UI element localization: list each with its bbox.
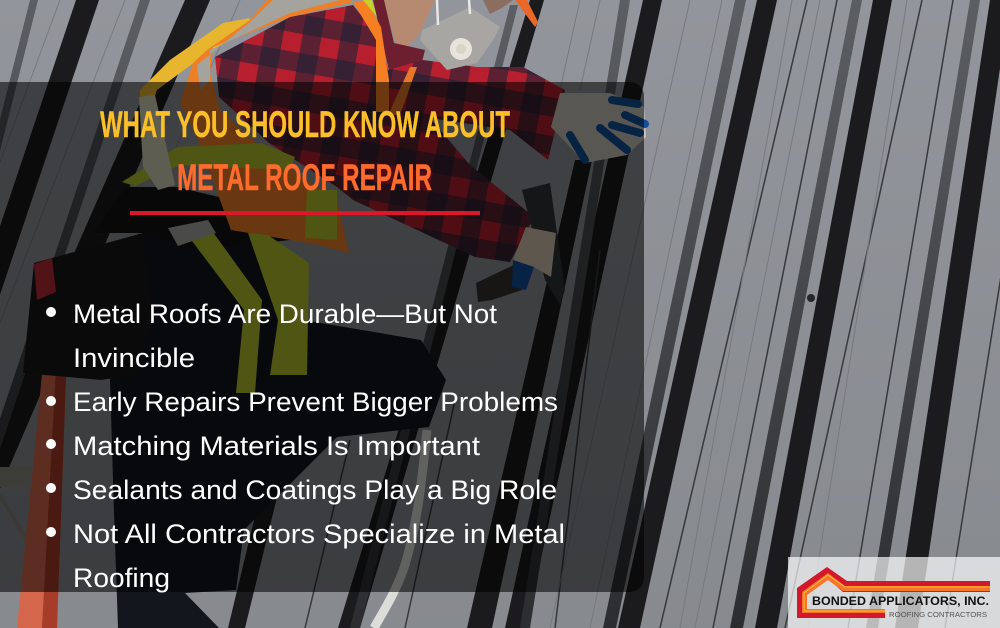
vest	[180, 0, 417, 253]
title: METAL ROOF REPAIR	[177, 157, 432, 198]
harness buckle	[168, 220, 216, 246]
harness strap: left leg	[189, 228, 262, 393]
lower glove	[512, 227, 556, 290]
roof: thin dark lines	[305, 0, 1000, 628]
bullet list: Roofing	[73, 563, 170, 593]
tool belt	[93, 187, 290, 250]
yellow shoulder strap	[140, 18, 250, 110]
logo company name: BONDED APPLICATORS, INC.	[812, 594, 989, 608]
tool pouch	[23, 233, 152, 380]
jeans	[110, 230, 446, 628]
ladder brace	[0, 495, 25, 537]
harness strap: cream	[139, 95, 175, 190]
bullet list: Not All Contractors Specialize in Metal	[73, 519, 565, 549]
ladder rail	[17, 293, 69, 628]
roof screw	[807, 294, 815, 302]
visor	[515, 0, 538, 27]
neck and shoulder skin	[383, 0, 435, 47]
mask	[420, 0, 500, 70]
rope	[374, 430, 427, 628]
bullet list: Metal Roofs Are Durable—But Not	[73, 299, 498, 329]
panel: dark translucent overlay	[0, 82, 644, 592]
harness strap: right leg	[248, 233, 309, 375]
ladder rung	[0, 467, 32, 487]
logo tagline: ROOFING CONTRACTORS	[889, 610, 987, 619]
harness chest band	[122, 143, 295, 186]
title: WHAT YOU SHOULD KNOW ABOUT	[100, 104, 510, 145]
title underline	[130, 211, 480, 215]
bullet list: Sealants and Coatings Play a Big Role	[73, 475, 557, 505]
drill	[476, 183, 565, 305]
collar	[373, 0, 425, 75]
bullet list: Early Repairs Prevent Bigger Problems	[73, 387, 558, 417]
pouch red trim	[34, 258, 56, 300]
shirt	[215, 5, 565, 262]
bullet list: Invincible	[73, 343, 195, 373]
logo panel	[788, 557, 1000, 628]
bullet list	[46, 299, 565, 593]
bullet list: Matching Materials Is Important	[73, 431, 481, 461]
title	[100, 104, 510, 198]
harness strap: vertical	[305, 190, 337, 240]
upper glove	[551, 93, 646, 163]
face	[483, 0, 513, 14]
logo mark: house outline	[797, 567, 990, 618]
